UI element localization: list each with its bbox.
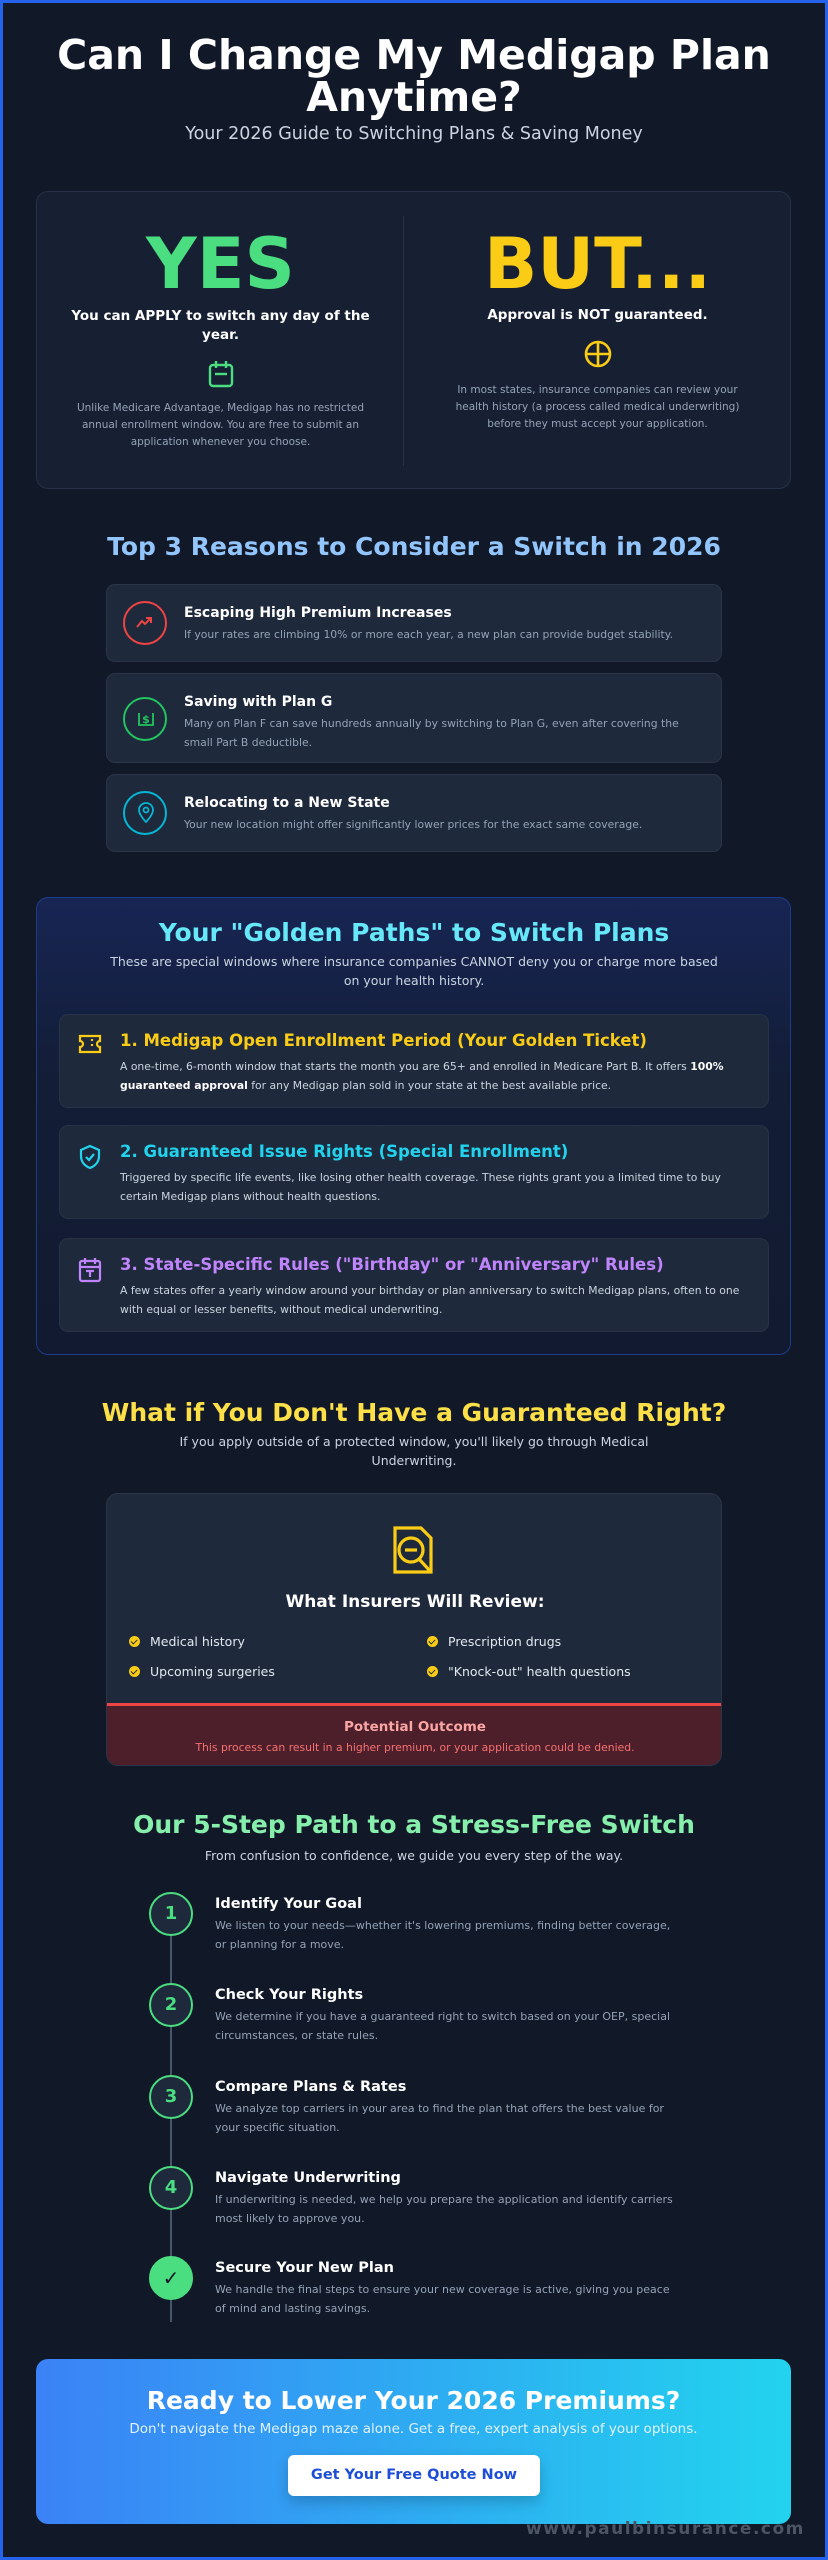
path card 1 [59,1014,769,1108]
review list: "Knock-out" health questions [448,1664,631,1679]
step 2: Check Your Rights [215,1987,363,2003]
path card 1: 1. Medigap Open Enrollment Period (Your Golden Ticket) [120,1031,647,1050]
step 2 [149,1983,670,2042]
path card 2: Triggered by specific life events, like losing other health coverage. These rights grant you a limited time to buy certain Medigap plans without health questions. [120,1171,721,1203]
callout: potential outcome: Potential Outcome [344,1719,486,1735]
callout: potential outcome: This process can result in a higher premium, or your application could be denied. [195,1741,635,1754]
what if intro: If you apply outside of a protected window, you'll likely go through Medical Underwriting. [180,1434,648,1468]
subtitle: Your 2026 Guide to Switching Plans & Saving Money [185,124,643,144]
reason card 2: Saving with Plan G [184,694,332,710]
step 5: ✓ [163,2266,179,2290]
step 1: Identify Your Goal [215,1896,362,1912]
yes description: Unlike Medicare Advantage, Medigap has no restricted annual enrollment window. You are free to submit an application whenever you choose. [77,402,364,448]
icon: plus circle [584,340,612,368]
step 5 [149,2256,670,2315]
icon: money [123,697,167,741]
but column [456,223,739,430]
reason card 1: If your rates are climbing 10% or more each year, a new plan can provide budget stability. [184,628,673,641]
step 4 [149,2166,673,2225]
reason card 3: Relocating to a New State [184,795,390,811]
review list: Medical history [150,1634,245,1649]
reason card 2: Many on Plan F can save hundreds annually by switching to Plan G, even after covering the small Part B deductible. [184,717,679,749]
icon: document search [393,1526,433,1574]
path card 3: A few states offer a yearly window around your birthday or plan anniversary to switch Medigap plans, often to one with equal or lesser benefits, without medical underwriting. [120,1284,739,1316]
step 4: 4 [165,2177,177,2198]
BUT heading: BUT... [484,223,711,305]
cta button [288,2455,540,2496]
cta button: Get Your Free Quote Now [311,2467,517,2483]
title [57,31,771,121]
path card 2 [59,1125,769,1219]
review list: Upcoming surgeries [150,1664,275,1679]
step 4: Navigate Underwriting [215,2170,401,2186]
title: Anytime? [306,73,522,121]
reason card 3 [106,774,722,852]
step 1: 1 [165,1903,177,1924]
cta subtext: Don't navigate the Medigap maze alone. Get a free, expert analysis of your options. [129,2421,698,2437]
path card 3: 3. State-Specific Rules ("Birthday" or "Anniversary" Rules) [120,1255,664,1274]
panel: call to action [36,2359,791,2524]
panel: underwriting review [106,1493,722,1766]
panel: yes / but [36,191,791,489]
step 1 [149,1892,670,1951]
step 1: We listen to your needs—whether it's lowering premiums, finding better coverage, or planning for a move. [215,1919,670,1951]
icon: calendar event [78,1258,102,1282]
cta heading: Ready to Lower Your 2026 Premiums? [147,2386,680,2415]
path card 1: A one-time, 6-month window that starts the month you are 65+ and enrolled in Medicare Part B. It offers 100% guaranteed approval for any Medigap plan sold in your state at the best available price. [120,1060,724,1092]
YES heading: YES [146,223,295,305]
review heading: What Insurers Will Review: [285,1592,545,1612]
yes statement: You can APPLY to switch any day of the year. [71,308,370,343]
reason card 3: Your new location might offer significantly lower prices for the exact same coverage. [184,818,642,831]
timeline [170,1936,172,2322]
step 3: Compare Plans & Rates [215,2079,406,2095]
review list [129,1634,631,1679]
reason card 2 [106,673,722,763]
step 2: 2 [165,1994,177,2015]
path card 2: 2. Guaranteed Issue Rights (Special Enrollment) [120,1142,568,1161]
heading: top 3 reasons: Top 3 Reasons to Consider a Switch in 2026 [107,532,721,561]
icon: shield check [80,1144,100,1170]
step 3 [149,2075,664,2134]
icon: location pin [123,791,167,835]
path card 3 [59,1238,769,1332]
icon: trend up [123,601,167,645]
title: Can I Change My Medigap Plan [57,31,771,79]
golden paths intro: These are special windows where insurance companies CANNOT deny you or charge more based on your health history. [110,954,718,988]
icon: money: $ [142,713,150,726]
step 2: We determine if you have a guaranteed right to switch based on your OEP, special circumstances, or state rules. [215,2010,670,2042]
but description: In most states, insurance companies can review your health history (a process called medical underwriting) before they must accept your application. [456,384,739,430]
icon: ticket [78,1034,102,1054]
review list: Prescription drugs [448,1634,561,1649]
5-step intro: From confusion to confidence, we guide you every step of the way. [205,1848,623,1863]
yes column [71,223,370,448]
reason card 1 [106,584,722,662]
heading: what if: What if You Don't Have a Guaranteed Right? [102,1398,726,1427]
step 5: We handle the final steps to ensure your new coverage is active, giving you peace of mind and lasting savings. [215,2283,670,2315]
callout: potential outcome [107,1703,723,1767]
but statement: Approval is NOT guaranteed. [487,307,708,323]
icon: calendar [208,361,234,388]
step 5: Secure Your New Plan [215,2260,394,2276]
step 4: If underwriting is needed, we help you prepare the application and identify carriers most likely to approve you. [215,2193,673,2225]
heading: golden paths: Your "Golden Paths" to Switch Plans [159,918,669,947]
panel: golden paths [36,897,791,1355]
step 3: 3 [165,2086,177,2107]
reason card 1: Escaping High Premium Increases [184,605,452,621]
step 3: We analyze top carriers in your area to find the plan that offers the best value for your specific situation. [215,2102,664,2134]
heading: 5-step: Our 5-Step Path to a Stress-Free Switch [133,1810,695,1839]
watermark: www.paulbinsurance.com [526,2519,805,2539]
